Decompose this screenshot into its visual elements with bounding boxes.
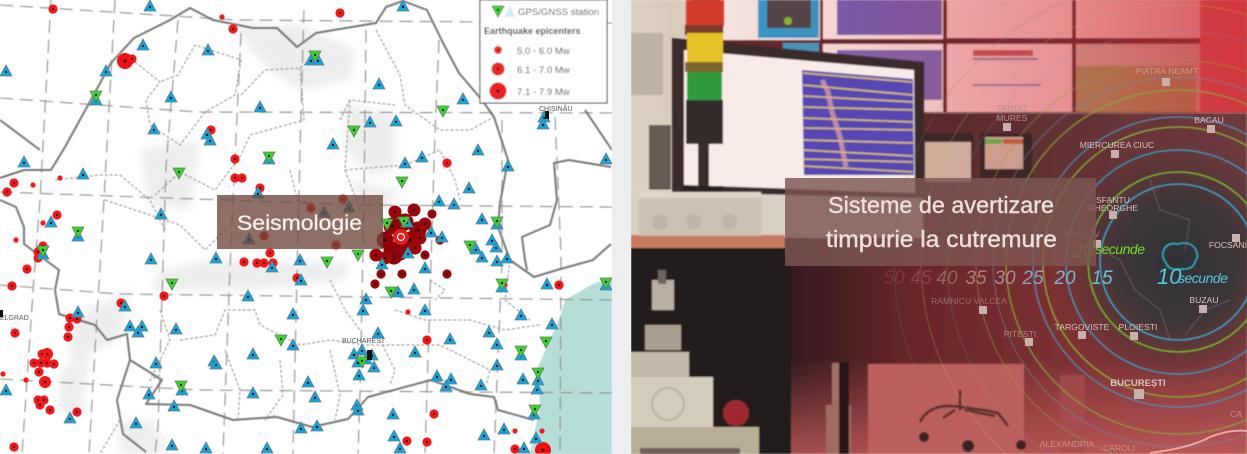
country border	[0, 1, 612, 452]
warning map: countdown numbers: 35	[965, 268, 987, 289]
warning map: city names: GHEORGHE	[1088, 203, 1138, 213]
warning map: city names: PITESTI	[1004, 329, 1036, 339]
title box: early warning systems: Sisteme de avertizare	[828, 192, 1054, 218]
GPS/GNSS stations (green triangles)	[37, 51, 612, 416]
warning map: city names: TANGU	[997, 103, 1027, 113]
warning map: countdown numbers	[884, 244, 1113, 284]
county borders	[55, 30, 540, 454]
warning map: city names: CAROLI	[1103, 443, 1135, 453]
legend: GPS/GNSS station	[518, 7, 599, 18]
warning map: city names: PIATRA NEAMT	[1136, 66, 1199, 76]
map grid lines	[0, 0, 612, 454]
warning map: city names: CA	[1230, 409, 1242, 419]
warning map: city markers	[979, 78, 1240, 399]
title box: early warning systems: timpurie la cutremure	[826, 226, 1057, 252]
photo: white junction box	[638, 198, 762, 237]
legend: Earthquake epicenters	[484, 26, 581, 36]
warning map: secunde labels: 10	[1157, 264, 1182, 289]
earthquake epicenters	[0, 4, 564, 454]
legend: 5.0 - 6.0 Mw	[517, 46, 570, 57]
warning map: countdown numbers: 20	[1071, 241, 1094, 262]
title box: early warning systems	[785, 178, 1096, 266]
warning map: city names: BUZAU	[1189, 295, 1219, 305]
photo: back wall and video wall	[631, 0, 1247, 454]
map city labels	[0, 104, 572, 360]
legend: 7.1 - 7.9 Mw	[517, 87, 570, 98]
warning map: countdown numbers: 45	[910, 268, 932, 289]
warning map: city names: MIERCUREA CIUC	[1080, 140, 1154, 150]
warning map: secunde labels	[1095, 244, 1228, 284]
warning map: countdown numbers: 25	[1021, 268, 1044, 289]
photo: equipment	[652, 280, 674, 310]
map city labels: ELGRAD	[0, 315, 29, 322]
sea	[530, 277, 612, 454]
warning map: countdown numbers: 40	[936, 268, 958, 289]
Vrancea epicenter cluster	[370, 204, 452, 289]
title box: Seismologie	[217, 195, 383, 249]
warning map: city names: FOCSANI	[1209, 240, 1247, 250]
warning map: city names: BRASOV	[1064, 229, 1100, 239]
warning map: countdown numbers: 15	[1091, 268, 1113, 289]
gutter between panels	[612, 0, 631, 454]
legend: 6.1 - 7.0 Mw	[517, 65, 570, 76]
warning map: secunde labels: secunde	[1178, 270, 1228, 286]
warning map: city names: ALEXANDRIA	[1040, 439, 1094, 449]
warning map: countdown numbers: 30	[994, 268, 1016, 289]
warning map: city names: RAMNICU VALCEA	[931, 296, 1007, 306]
warning map: city names	[931, 66, 1247, 453]
warning map: city names: MURES	[996, 113, 1028, 123]
map city labels: CHIȘINĂU	[539, 104, 572, 113]
warning map: city names: BUCUREȘTI	[1110, 378, 1166, 389]
warning map: dark epicentral area	[1068, 158, 1247, 377]
legend	[480, 0, 607, 103]
warning map: secunde labels: secunde	[1095, 241, 1145, 257]
red gradient overlay on video wall	[724, 0, 1247, 113]
warning map: city names: SFANTU	[1096, 195, 1130, 205]
seismic stations (blue triangles)	[0, 0, 612, 453]
photo: console and lower room	[631, 0, 1247, 454]
panel: early warning systems photo	[631, 0, 1247, 454]
warning map: countdown numbers: 50	[883, 268, 905, 289]
map terrain relief	[60, 25, 400, 454]
title box: Seismologie: Seismologie	[237, 212, 362, 235]
warning map: countdown numbers: 20	[1053, 268, 1076, 289]
warning map: contour rings	[894, 0, 1247, 454]
warning map: coastline line	[1150, 431, 1247, 453]
map city labels: BUCHAREST	[342, 338, 386, 345]
warning map: city names: BACAU	[1194, 115, 1224, 125]
photo: monitor	[672, 38, 924, 198]
warning map: city names: PLOIESTI	[1119, 322, 1157, 332]
panel: seismology map	[0, 0, 612, 454]
photo: signal tower	[686, 0, 724, 26]
warning map: city names: TARGOVISTE	[1055, 322, 1110, 332]
